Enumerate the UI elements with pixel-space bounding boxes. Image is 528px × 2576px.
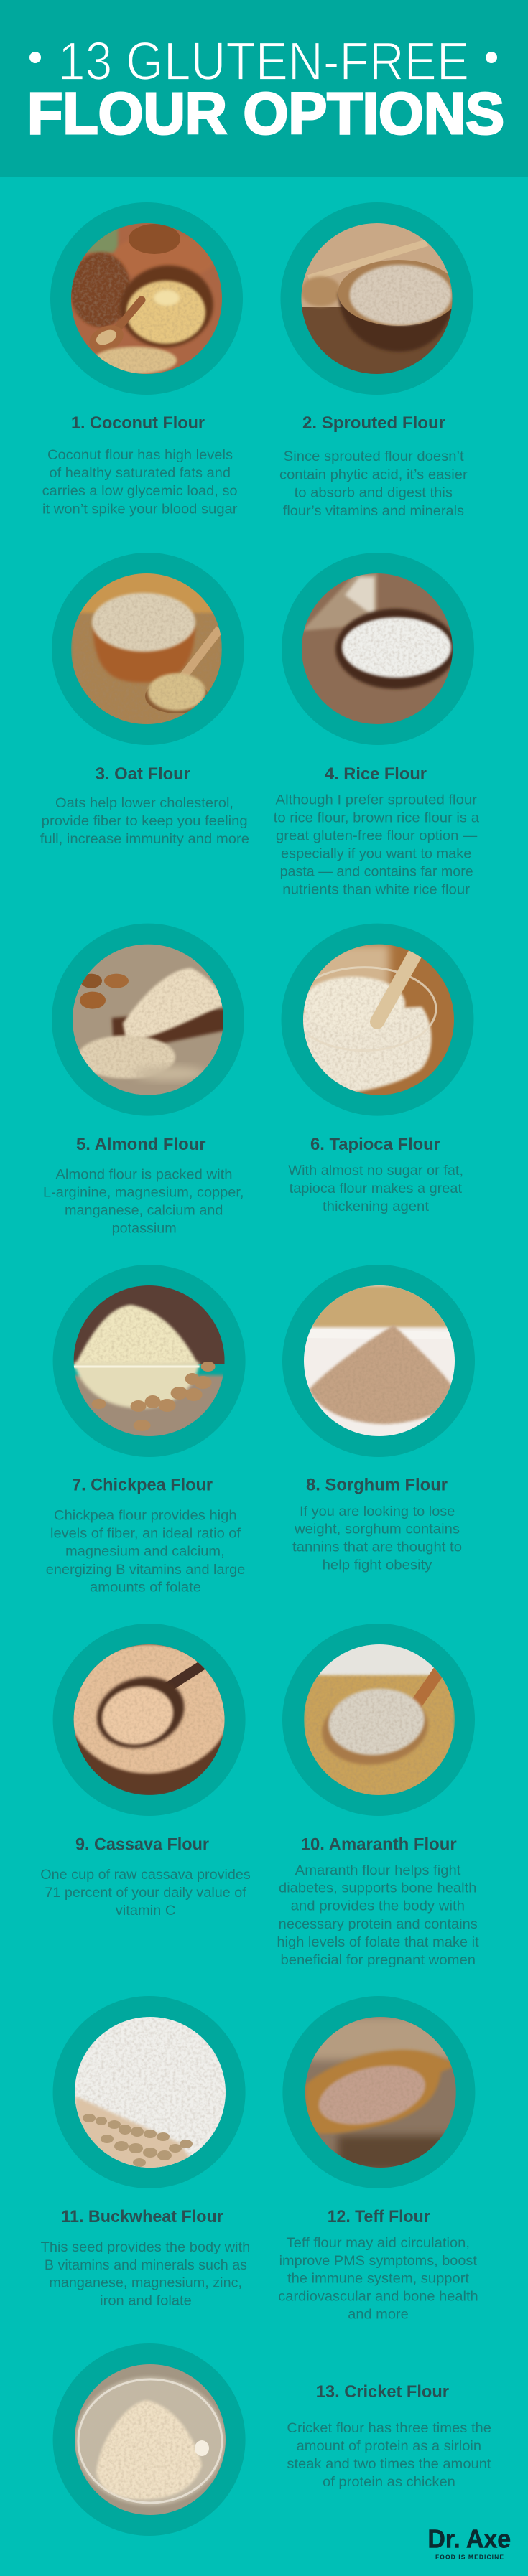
text block (46, 1507, 245, 1596)
title line 1: 13 GLUTEN-FREE (58, 31, 469, 91)
header band (0, 0, 528, 177)
text block: thickening agent (323, 1199, 430, 1214)
panel: teff flour (278, 1996, 478, 2323)
heading: 12. Teff Flour (328, 2207, 430, 2226)
text block: Although I prefer sprouted flour (276, 792, 478, 808)
text block: great gluten-free flour option — (276, 828, 478, 844)
text block: help fight obesity (323, 1557, 432, 1573)
text block: iron and folate (100, 2293, 192, 2309)
text block: high levels of folate that make it (277, 1934, 479, 1950)
panel: sprouted flour (279, 202, 473, 519)
text block: diabetes, supports bone health (279, 1881, 476, 1896)
image: teff flour (282, 1996, 475, 2188)
text block: This seed provides the body with (41, 2239, 250, 2255)
image: chickpea flour (53, 1265, 246, 1457)
image: cassava flour (53, 1624, 246, 1816)
panel: oat flour (40, 553, 249, 847)
panel: almond flour (43, 924, 244, 1236)
text block: levels of fiber, an ideal ratio of (50, 1525, 241, 1541)
image: buckwheat flour (53, 1996, 246, 2188)
text block: L-arginine, magnesium, copper, (43, 1184, 244, 1200)
text block: full, increase immunity and more (40, 831, 249, 847)
image: tapioca flour (282, 924, 474, 1116)
heading: 7. Chickpea Flour (72, 1476, 213, 1495)
heading: 8. Sorghum Flour (306, 1476, 448, 1495)
text block (278, 2235, 478, 2323)
heading: 1. Coconut Flour (71, 413, 205, 433)
text block (41, 2239, 250, 2309)
panel: amaranth flour (277, 1624, 479, 1968)
text block (277, 1863, 479, 1968)
text block: Cricket flour has three times the (287, 2420, 491, 2436)
panel: rice flour (274, 553, 479, 898)
text block: of healthy saturated fats and (49, 465, 231, 481)
image: sprouted flour (280, 202, 473, 395)
text block (40, 795, 249, 847)
text block: pasta — and contains far more (280, 864, 473, 880)
text block: Coconut flour has high levels (47, 447, 233, 463)
text block: magnesium and calcium, (65, 1543, 225, 1559)
heading: 6. Tapioca Flour (310, 1135, 440, 1154)
text block: flour’s vitamins and minerals (283, 503, 464, 519)
text block (40, 1867, 251, 1919)
image: rice flour (282, 553, 474, 745)
image: sorghum flour (282, 1265, 475, 1457)
text block: B vitamins and minerals such as (45, 2257, 247, 2273)
image: coconut flour (50, 202, 243, 395)
text block: Chickpea flour provides high (54, 1507, 237, 1523)
text block: nutrients than white rice flour (282, 882, 471, 898)
image: almond flour (52, 924, 244, 1116)
heading: 10. Amaranth Flour (301, 1835, 457, 1854)
text block: Oats help lower cholesterol, (55, 795, 233, 811)
panel: cassava flour (40, 1624, 251, 1919)
panel: sorghum flour (282, 1265, 475, 1573)
text block: energizing B vitamins and large (46, 1562, 245, 1578)
text block: necessary protein and contains (279, 1916, 478, 1932)
text block: especially if you want to make (281, 846, 471, 862)
text block: weight, sorghum contains (294, 1522, 460, 1537)
text block: of protein as chicken (323, 2474, 455, 2490)
text block: Amaranth flour helps fight (295, 1863, 461, 1878)
text block (288, 1163, 463, 1214)
text block: Since sprouted flour doesn’t (284, 449, 464, 464)
heading: 3. Oat Flour (96, 764, 190, 784)
heading: 9. Cassava Flour (75, 1835, 209, 1854)
logo: Dr. Axe: Dr. Axe (427, 2524, 511, 2553)
text block: improve PMS symptoms, boost (279, 2253, 477, 2269)
text block: vitamin C (116, 1903, 175, 1919)
text block: With almost no sugar or fat, (288, 1163, 463, 1179)
image: oat flour (52, 553, 244, 745)
heading: 11. Buckwheat Flour (61, 2207, 223, 2226)
text block: potassium (112, 1220, 177, 1236)
text block (274, 792, 479, 898)
text block: Almond flour is packed with (55, 1167, 233, 1183)
text block: it won’t spike your blood sugar (42, 501, 238, 517)
text block: contain phytic acid, it’s easier (279, 467, 468, 482)
image: amaranth flour (282, 1624, 475, 1816)
text block: to absorb and digest this (295, 485, 453, 501)
text block: and provides the body with (291, 1898, 465, 1914)
text block: 71 percent of your daily value of (45, 1885, 246, 1901)
text block: If you are looking to lose (300, 1504, 455, 1519)
heading: 2. Sprouted Flour (302, 413, 445, 433)
text block: tapioca flour makes a great (290, 1181, 463, 1196)
text block: carries a low glycemic load, so (42, 483, 238, 499)
text block (292, 1504, 462, 1573)
text block: the immune system, support (287, 2271, 470, 2287)
text block: steak and two times the amount (287, 2456, 491, 2472)
text block: manganese, magnesium, zinc, (49, 2275, 242, 2291)
text block: to rice flour, brown rice flour is a (274, 810, 479, 826)
panel: buckwheat flour (41, 1996, 250, 2309)
text block: beneficial for pregnant women (280, 1952, 476, 1968)
panel: chickpea flour (46, 1265, 246, 1596)
heading: 5. Almond Flour (76, 1135, 205, 1154)
text block: and more (348, 2307, 409, 2323)
logo: Dr. Axe: FOOD IS MEDICINE (435, 2554, 504, 2561)
title line 2: FLOUR OPTIONS (27, 81, 504, 146)
panel: coconut flour (42, 202, 243, 517)
text block: One cup of raw cassava provides (40, 1867, 251, 1883)
text block (287, 2420, 491, 2490)
text block: Teff flour may aid circulation, (286, 2235, 470, 2251)
text block: tannins that are thought to (292, 1540, 462, 1555)
text block (42, 447, 238, 517)
text block: amounts of folate (90, 1580, 201, 1596)
text block: manganese, calcium and (65, 1203, 223, 1219)
panel: cricket flour (53, 2343, 491, 2536)
text block (43, 1167, 244, 1236)
text block: cardiovascular and bone health (278, 2289, 478, 2305)
heading: 4. Rice Flour (325, 764, 427, 784)
heading: 13. Cricket Flour (316, 2382, 449, 2402)
text block: amount of protein as a sirloin (297, 2438, 481, 2454)
panel: tapioca flour (282, 924, 474, 1214)
text block (279, 449, 468, 519)
image: cricket flour (53, 2343, 246, 2536)
text block: provide fiber to keep you feeling (42, 813, 248, 829)
